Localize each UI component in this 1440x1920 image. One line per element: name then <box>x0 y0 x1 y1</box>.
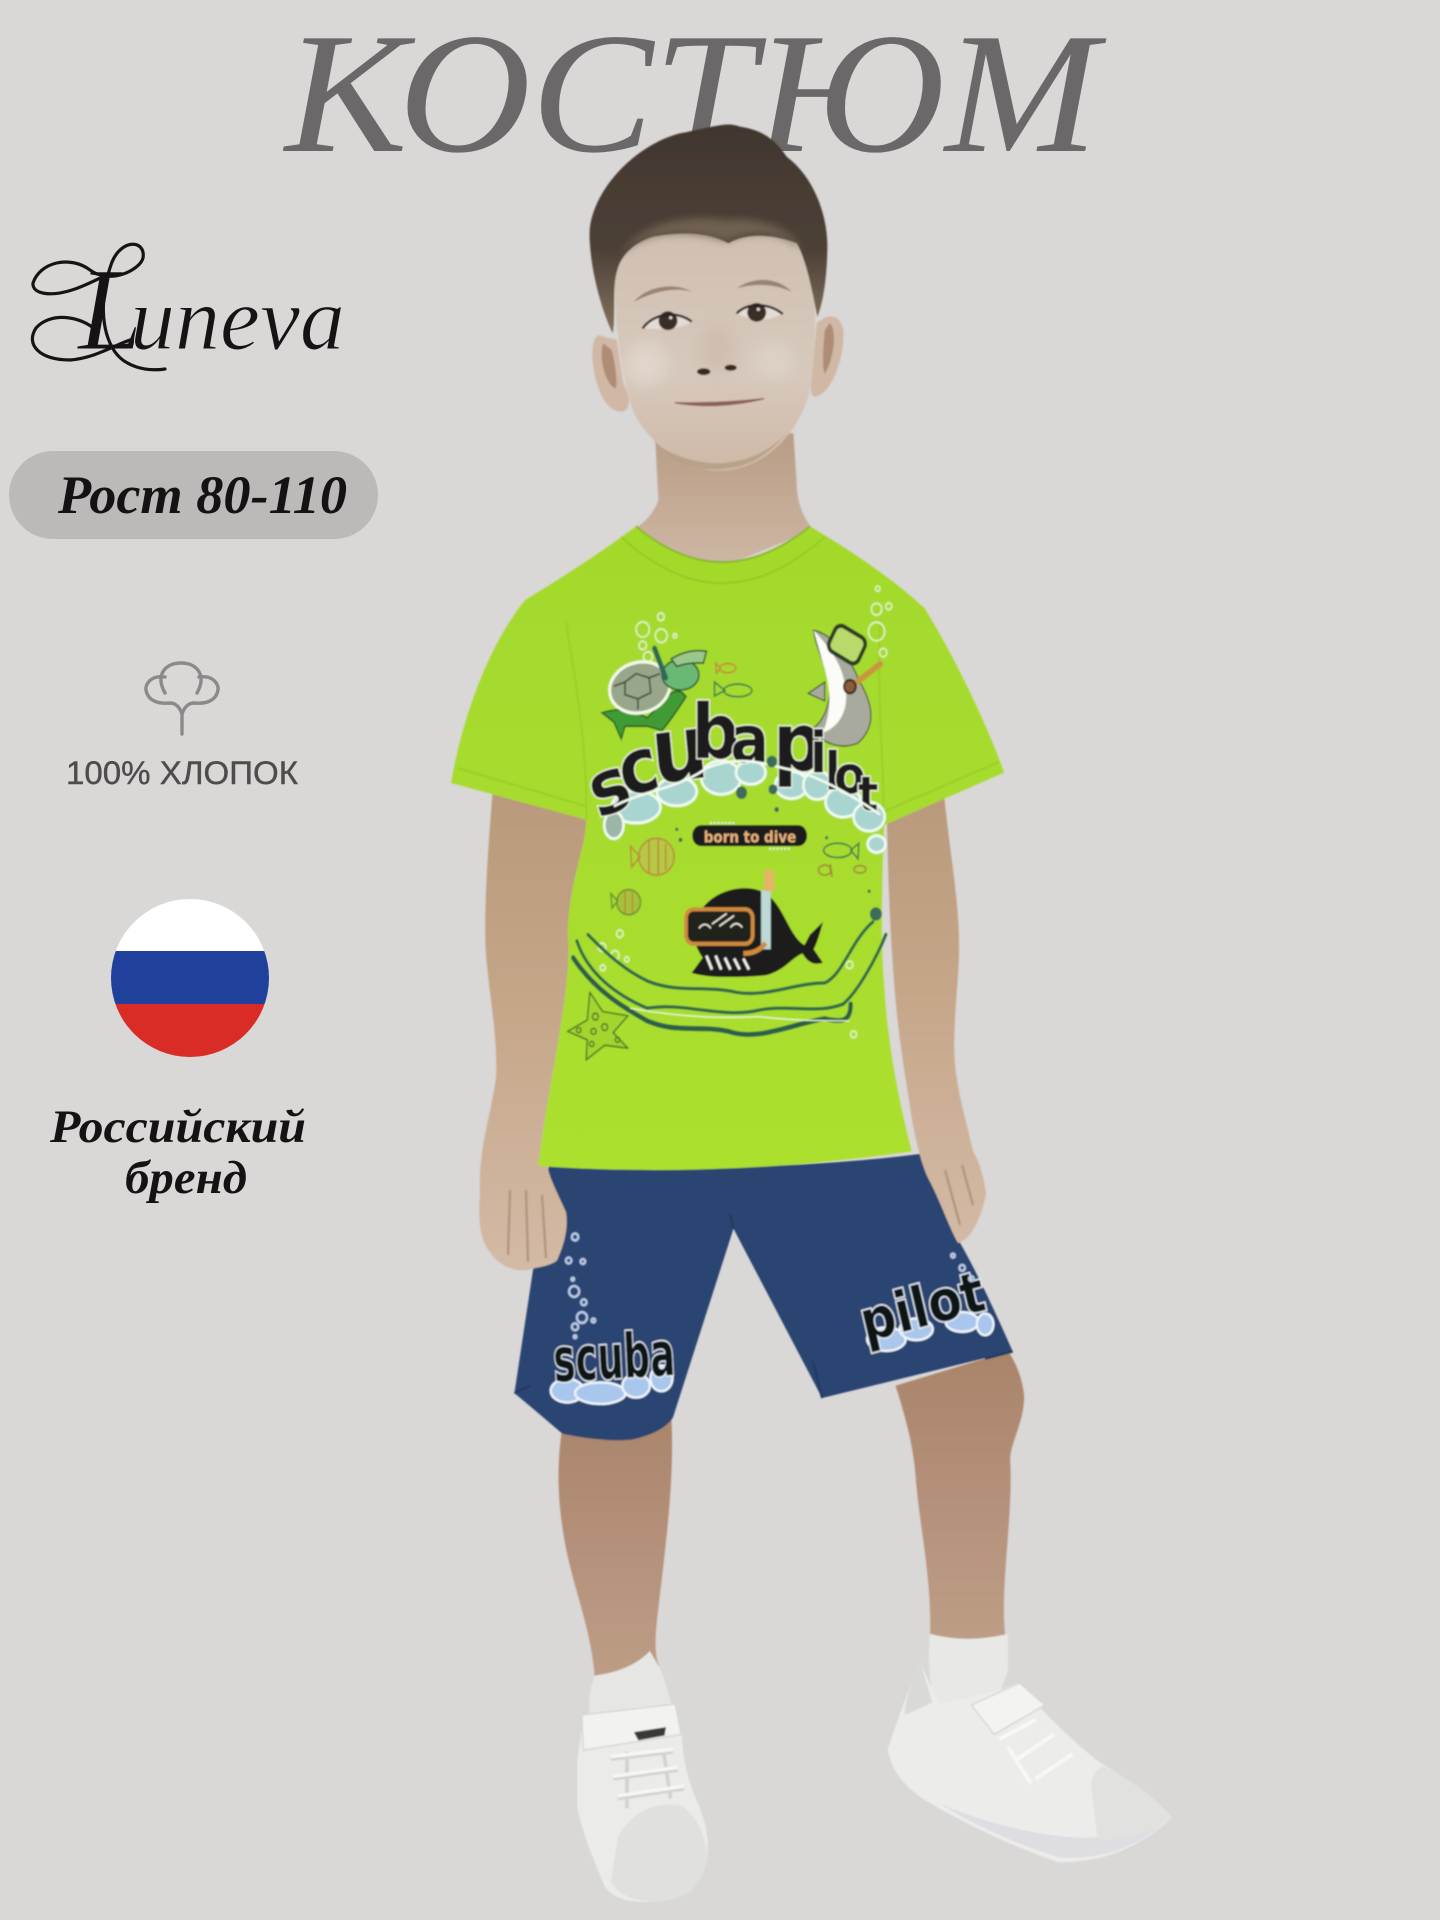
brand origin text: бренд <box>125 1152 247 1204</box>
print: scuba pilot lettering: c <box>609 719 667 815</box>
t-shirt <box>451 526 1004 1170</box>
print: fishes <box>611 663 866 915</box>
brand origin text <box>49 1101 306 1204</box>
head and neck <box>590 125 843 573</box>
shorts bubbles <box>566 1234 974 1338</box>
eyebrows <box>634 280 792 302</box>
brand origin text: Российский <box>49 1101 306 1153</box>
print: starfish <box>568 992 628 1060</box>
shorts <box>514 1154 1013 1440</box>
infographic canvas <box>9 37 1171 1902</box>
cotton label: 100% ХЛОПОК <box>66 755 298 791</box>
nose <box>697 368 710 375</box>
left shoe <box>577 1704 708 1902</box>
print: turtle <box>602 648 706 739</box>
neck <box>633 433 813 573</box>
left leg <box>558 1405 672 1680</box>
boy model <box>451 125 1172 1902</box>
right sock <box>929 1634 1008 1715</box>
print: waves <box>573 922 886 1035</box>
print: scuba pilot lettering: o <box>834 745 866 806</box>
print: scuba pilot lettering: p <box>773 696 823 790</box>
print: scuba pilot lettering: i <box>810 719 827 786</box>
ears <box>592 335 629 412</box>
left sock <box>589 1651 675 1725</box>
print: dots <box>675 756 882 921</box>
hair <box>590 125 827 333</box>
mouth <box>675 399 764 406</box>
print: scuba pilot lettering: u <box>646 694 712 806</box>
print: water line <box>614 761 880 815</box>
shorts print: scuba: scuba <box>552 1319 677 1397</box>
eyes <box>643 315 692 329</box>
print: scuba pilot lettering: t <box>858 766 878 822</box>
print: born to dive badge: born to dive <box>704 828 796 847</box>
print: water blobs <box>604 761 885 852</box>
print: whale <box>686 870 823 977</box>
shorts print: scuba <box>551 1319 677 1404</box>
face <box>614 230 815 471</box>
shorts print: pilot: pilot <box>853 1258 991 1355</box>
right arm <box>886 775 986 1243</box>
brand logo: uneva <box>130 270 345 369</box>
title: КОСТЮМ <box>282 0 1107 189</box>
height pill: Рост 80-110 <box>57 465 347 525</box>
right shoe <box>888 1663 1172 1862</box>
print: born to dive badge <box>692 823 807 849</box>
right leg <box>896 1351 1024 1641</box>
print: scuba pilot lettering: l <box>825 741 841 802</box>
height pill <box>9 451 378 539</box>
print: bubbles <box>598 586 892 1038</box>
brand logo <box>32 244 345 375</box>
print: scuba pilot lettering <box>577 688 878 836</box>
print: scuba pilot lettering: b <box>692 688 739 776</box>
print: scuba pilot lettering: s <box>577 738 641 836</box>
left arm <box>479 775 610 1270</box>
print: shark <box>808 623 880 746</box>
icon: russian flag <box>111 899 269 1057</box>
legs, socks, shoes and shorts <box>514 1154 1172 1902</box>
icon: cotton <box>146 663 218 734</box>
print: scuba pilot lettering: a <box>730 703 769 778</box>
brand logo: L <box>76 244 144 375</box>
